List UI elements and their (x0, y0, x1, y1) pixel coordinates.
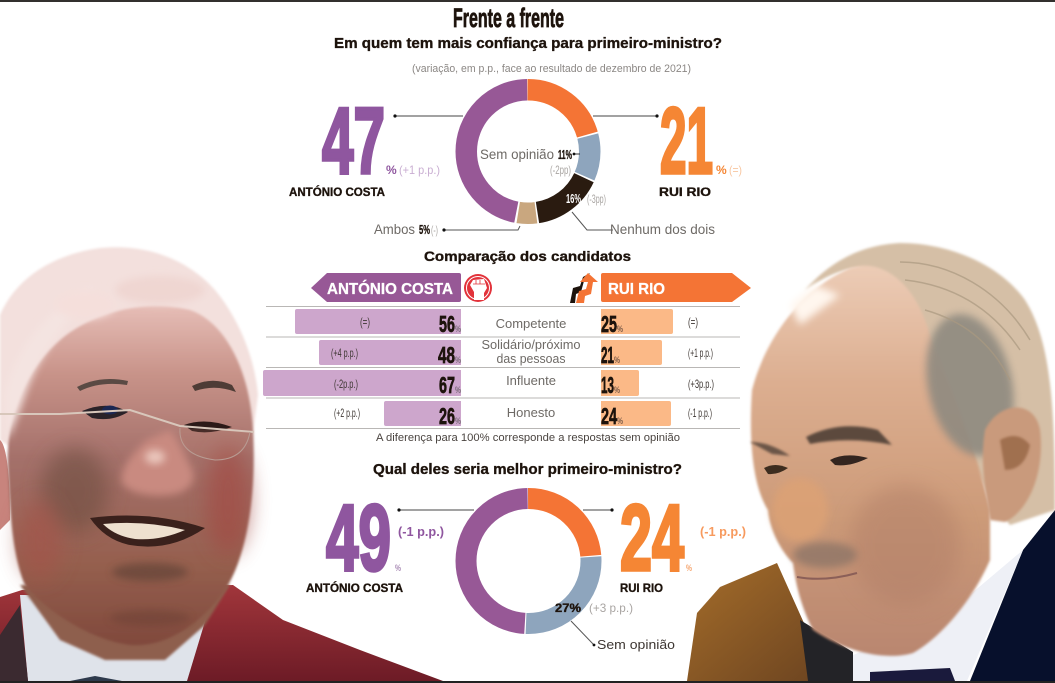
label: ambos 5% (374, 222, 520, 237)
row: Honesto: 24 (601, 403, 617, 429)
donut chart: confidence (466, 90, 590, 213)
row: Influente: 13 (601, 372, 614, 398)
row: Influente: 67 (439, 372, 455, 398)
leader: Costa second chart (397, 508, 474, 512)
stat: António Costa 49%: 49 (326, 485, 391, 590)
bottom rule (0, 681, 1055, 683)
label: sem opinião 27% (555, 601, 675, 652)
row: Competente: % (617, 324, 623, 334)
footnote: A diferença para 100% corresponde a respostas sem opinião (376, 432, 680, 444)
top rule (0, 0, 1055, 2)
row: Honesto: Honesto (507, 405, 555, 420)
row: Competente: (=) (688, 315, 698, 329)
label: sem opinião 27%: (+3 p.p.) (589, 601, 633, 615)
leader: Costa (393, 114, 463, 118)
row: Solidário/próximo: Solidário/próximo (482, 337, 580, 352)
row: Influente: % (455, 385, 461, 395)
label: ambos 5%: 5% (419, 222, 430, 237)
icon: PSD arrows (570, 273, 598, 303)
row: Honesto (334, 401, 712, 429)
stat: Rui Rio 21%: (=) (729, 163, 742, 177)
row: Competente: 56 (439, 311, 455, 337)
stat: Rui Rio 21%: % (716, 163, 727, 177)
row: Solidário/próximo: (+4 p.p.) (331, 346, 358, 360)
row: Competente (295, 309, 698, 337)
stat: António Costa 47%: ANTÓNIO COSTA (289, 184, 385, 199)
row: Competente: % (455, 324, 461, 334)
leader: Rio (593, 114, 659, 118)
label: nenhum dos dois 16%: Nenhum dos dois (610, 222, 715, 237)
row: Influente: Influente (506, 373, 556, 388)
stat: Rui Rio 21%: RUI RIO (659, 185, 711, 199)
row: Honesto: % (617, 416, 623, 426)
subtitle note: (variação, em p.p., face ao resultado de dezembro de 2021) (412, 63, 691, 75)
label: ambos 5%: (-) (431, 223, 438, 237)
donut chart: best prime minister (466, 498, 591, 624)
stat: António Costa 47%: % (386, 163, 397, 177)
row: Honesto: 26 (439, 403, 455, 429)
stat: Rui Rio 24%: (-1 p.p.) (700, 524, 746, 539)
stat: Rui Rio 24%: RUI RIO (620, 581, 663, 595)
stat: António Costa 49%: % (395, 563, 401, 573)
row: Solidário/próximo: (+1 p.p.) (688, 346, 713, 360)
stat: Rui Rio 24%: % (686, 563, 692, 573)
stat: Rui Rio 24%: 24 (620, 485, 684, 590)
label: nenhum dos dois 16%: (-3pp) (587, 192, 606, 206)
label: sem opinião 11%: Sem opinião (480, 147, 554, 162)
stat: Rui Rio 21%: 21 (660, 88, 713, 193)
heading: confidence question: Em quem tem mais confiança para primeiro-ministro? (334, 35, 722, 52)
row: Competente: 25 (601, 311, 617, 337)
row: Influente: (-2p.p.) (334, 377, 358, 391)
row: Solidário/próximo: % (614, 355, 620, 365)
row: Solidário/próximo: % (455, 355, 461, 365)
stat: António Costa 49%: ANTÓNIO COSTA (306, 580, 403, 595)
row: Solidário/próximo: 21 (601, 342, 614, 368)
header arrow: Rui Rio (601, 273, 751, 302)
stat: António Costa 47%: (+1 p.p.) (399, 163, 440, 177)
row: Solidário/próximo (319, 337, 713, 368)
row: Honesto: (-1 p.p.) (688, 406, 712, 420)
header arrow: António Costa (311, 273, 461, 302)
label: sem opinião 11% (480, 147, 580, 177)
label: sem opinião 27%: 27% (555, 603, 581, 615)
label: sem opinião 27%: Sem opinião (597, 637, 675, 652)
header arrow: Rui Rio: RUI RIO (608, 281, 665, 298)
row: Influente (263, 370, 714, 398)
label: sem opinião 11%: (-2pp) (550, 163, 571, 177)
row: Honesto: % (455, 416, 461, 426)
leader: Rio second chart (583, 508, 614, 512)
heading: best prime minister: Qual deles seria melhor primeiro-ministro? (373, 461, 682, 478)
stat: António Costa 47% (289, 88, 440, 199)
row: Influente: (+3p.p.) (688, 377, 714, 391)
row: Influente: % (614, 385, 620, 395)
title: Frente a frente (453, 3, 564, 33)
row: Competente: (=) (360, 315, 370, 329)
heading: comparison: Comparação dos candidatos (424, 248, 631, 264)
row: Competente: Competente (496, 316, 566, 331)
portrait: António Costa (0, 247, 443, 681)
label: sem opinião 11%: 11% (558, 147, 572, 162)
stat: António Costa 47%: 47 (322, 88, 385, 193)
label: ambos 5%: Ambos (374, 222, 415, 237)
row: Solidário/próximo: 48 (438, 342, 455, 368)
row: Solidário/próximo: das pessoas (496, 351, 566, 366)
label: nenhum dos dois 16% (566, 191, 715, 237)
header arrow: António Costa: ANTÓNIO COSTA (327, 279, 453, 298)
icon: fist logo (464, 274, 492, 302)
stat: António Costa 49%: (-1 p.p.) (398, 524, 444, 539)
label: nenhum dos dois 16%: 16% (566, 191, 581, 206)
portrait: Rui Rio (687, 243, 1055, 681)
row: Honesto: (+2 p.p.) (334, 406, 360, 420)
